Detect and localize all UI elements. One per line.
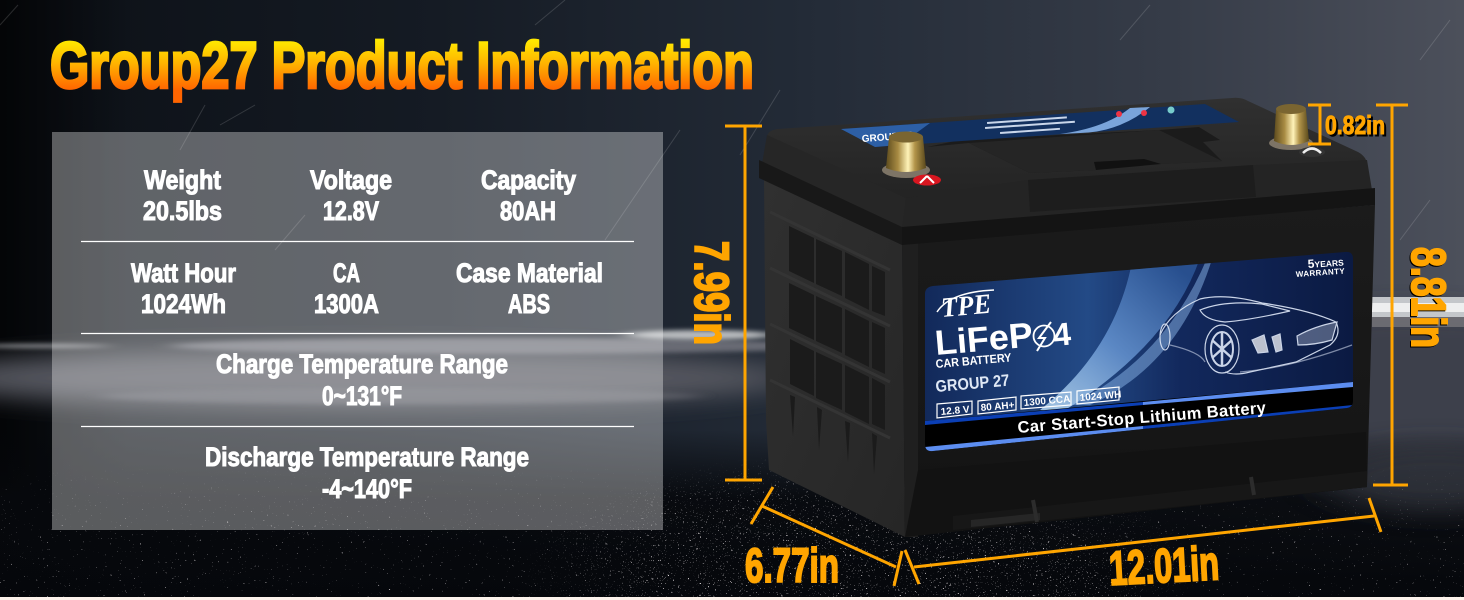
- label: product tagline: Car Start-Stop Lithium Battery: [1017, 399, 1267, 437]
- battery lid: [759, 98, 1375, 245]
- dimension: width 6.77in: 6.77in: [745, 540, 839, 593]
- spec: discharge temperature range: [205, 442, 529, 504]
- spec: charge temperature range: Charge Temperature Range: [216, 349, 508, 379]
- spec: voltage: Voltage: [310, 165, 392, 195]
- label: spec boxes: 80 AH+: [980, 400, 1015, 414]
- label: car sketch: [1160, 297, 1352, 374]
- spec: voltage: [310, 165, 392, 226]
- spec: cold cranking amps: 1300A: [314, 289, 379, 319]
- label: spec boxes: 1024 WH: [1079, 389, 1122, 404]
- LiFePO4 wordmark: LiFeP: [933, 316, 1034, 363]
- label: warranty: WARRANTY: [1296, 267, 1346, 279]
- spec: voltage: 12.8V: [323, 196, 379, 226]
- label: warranty: [1296, 254, 1346, 279]
- spec: cold cranking amps: CA: [333, 258, 360, 288]
- spec: capacity: Capacity: [481, 165, 576, 195]
- label: car battery: CAR BATTERY: [935, 350, 1012, 371]
- spec: case material: [456, 258, 603, 319]
- top sticker: [841, 104, 1239, 147]
- dimension: width 6.77in: [745, 487, 902, 593]
- dimension: terminal height 0.82in: [1308, 105, 1385, 144]
- spec: watt hour: 1024Wh: [141, 289, 226, 319]
- battery left side with ribbed grid: [764, 178, 905, 537]
- spec: charge temperature range: 0~131°F: [322, 381, 402, 411]
- spec: case material: ABS: [508, 289, 550, 319]
- dimension: terminal height 0.82in: 0.82in: [1325, 110, 1385, 140]
- LiFePO4 wordmark: 4: [1051, 316, 1073, 353]
- spec: capacity: 80AH: [500, 196, 556, 226]
- spec: weight: 20.5lbs: [143, 196, 222, 226]
- label swoosh: [1040, 258, 1200, 412]
- panel: product specifications: [52, 132, 663, 530]
- label: spec boxes: [937, 387, 1122, 418]
- spec: case material: Case Material: [456, 258, 603, 288]
- top sticker: GROUP 27: [861, 130, 913, 145]
- label: warranty: 5YEARS: [1307, 254, 1344, 271]
- spec: discharge temperature range: -4~140°F: [322, 474, 412, 504]
- dimension: total height 8.81in: 8.81in: [1401, 247, 1454, 348]
- front label: [925, 252, 1353, 452]
- logo: TPE: TPE: [940, 289, 992, 324]
- label: group 27: GROUP 27: [935, 372, 1010, 396]
- negative terminal: [1269, 104, 1325, 157]
- spec: discharge temperature range: Discharge Temperature Range: [205, 442, 529, 472]
- spec: capacity: [481, 165, 576, 226]
- label bands: [925, 382, 1353, 452]
- spec: charge temperature range: [216, 349, 508, 411]
- positive terminal: [882, 132, 941, 186]
- dimension: length 12.01in: [905, 498, 1381, 596]
- dimension: length 12.01in: 12.01in: [1108, 537, 1220, 596]
- spec: cold cranking amps: [314, 258, 379, 319]
- dimension: case height 7.99in: 7.99in: [684, 241, 737, 345]
- label: spec boxes: 1300 CCA: [1023, 394, 1071, 409]
- battery illustration: [759, 98, 1375, 537]
- spec: watt hour: [131, 258, 236, 319]
- spec: watt hour: Watt Hour: [131, 258, 236, 288]
- title: Group27 Product Information: [50, 28, 754, 102]
- spec: weight: [143, 165, 222, 226]
- label: spec boxes: 12.8 V: [940, 404, 970, 418]
- battery front face: [902, 205, 1375, 537]
- spec: weight: Weight: [144, 165, 221, 195]
